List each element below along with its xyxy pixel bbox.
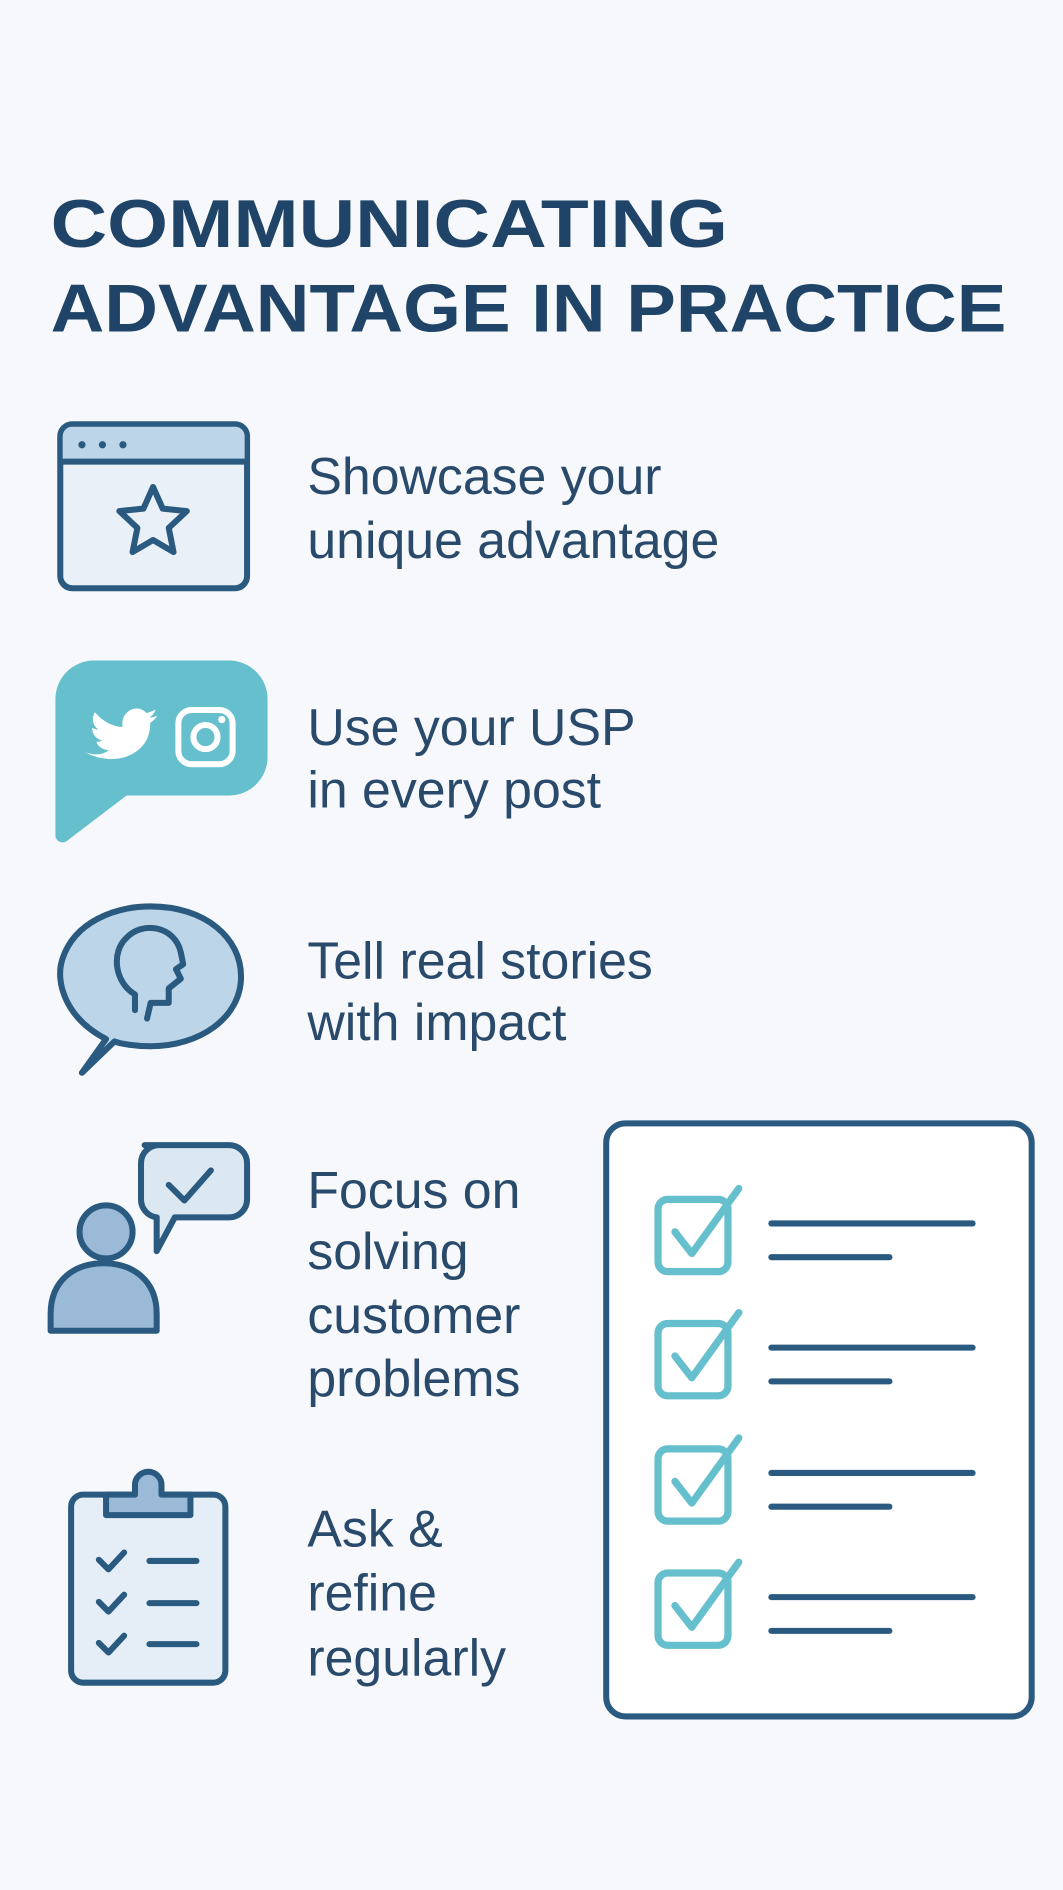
- text: focus: problems: [307, 1349, 520, 1407]
- icon: social bubble: [55, 661, 268, 842]
- text: USP: [307, 698, 636, 819]
- title: ADVANTAGE IN PRACTICE: [51, 271, 1006, 346]
- checklist panel: [606, 1123, 1032, 1716]
- icon: person with check bubble: [51, 1145, 247, 1331]
- icon: clipboard: [71, 1472, 225, 1683]
- text: showcase: unique advantage: [307, 511, 719, 569]
- text: stories: Tell real stories: [307, 932, 653, 990]
- icon: story bubble with head: [60, 906, 241, 1073]
- text: ask: refine: [307, 1563, 437, 1621]
- text: ask: Ask &: [307, 1499, 443, 1557]
- text: focus: solving: [307, 1222, 469, 1280]
- title: [51, 187, 1006, 346]
- text: USP: in every post: [307, 761, 602, 819]
- text: ask: regularly: [307, 1628, 506, 1686]
- text: stories: with impact: [306, 993, 567, 1051]
- text: showcase: Showcase your: [307, 447, 662, 505]
- text: ask: [307, 1499, 506, 1686]
- title: COMMUNICATING: [51, 187, 728, 262]
- text: focus: [307, 1161, 520, 1407]
- text: USP: Use your USP: [307, 698, 636, 756]
- text: focus: Focus on: [307, 1161, 520, 1219]
- text: stories: [306, 932, 653, 1051]
- icon: browser with star: [60, 424, 247, 588]
- text: focus: customer: [307, 1286, 520, 1344]
- text: showcase: [307, 447, 719, 569]
